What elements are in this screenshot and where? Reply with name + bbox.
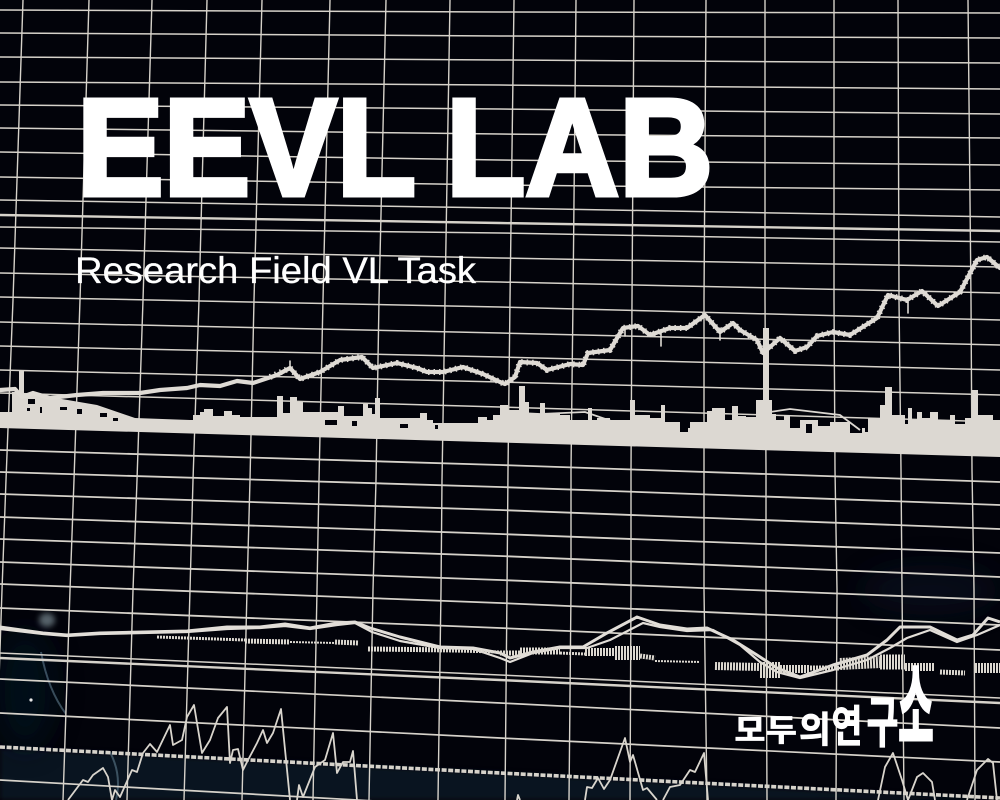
chart: oscillator histogram <box>157 637 1000 673</box>
subtitle: Research Field VL Task <box>75 250 477 291</box>
background reflections: faint blue tint <box>0 565 1000 800</box>
chart: price line <box>0 257 1000 398</box>
logo: 모두의연구소: 연 <box>832 704 862 752</box>
logo: 모두의연구소: 모 <box>735 713 765 748</box>
chart: bottom jagged signal line <box>68 705 997 800</box>
moving-average line over volume bars <box>500 409 860 430</box>
chart: volume bars along a slanted band <box>0 328 1000 457</box>
logo: 모두의연구소: 두 <box>766 713 797 748</box>
title: LAB <box>446 71 713 225</box>
title: EEVL <box>77 71 416 225</box>
logo: 모두의연구소: 소 <box>898 656 934 763</box>
logo: 모두의연구소 <box>735 656 934 763</box>
volume bar gaps <box>27 399 862 433</box>
logo: 모두의연구소: 의 <box>799 710 831 750</box>
title <box>77 71 713 225</box>
chart: oscillator lines (thick pair) <box>0 617 1000 678</box>
logo: 모두의연구소: 구 <box>867 692 898 754</box>
